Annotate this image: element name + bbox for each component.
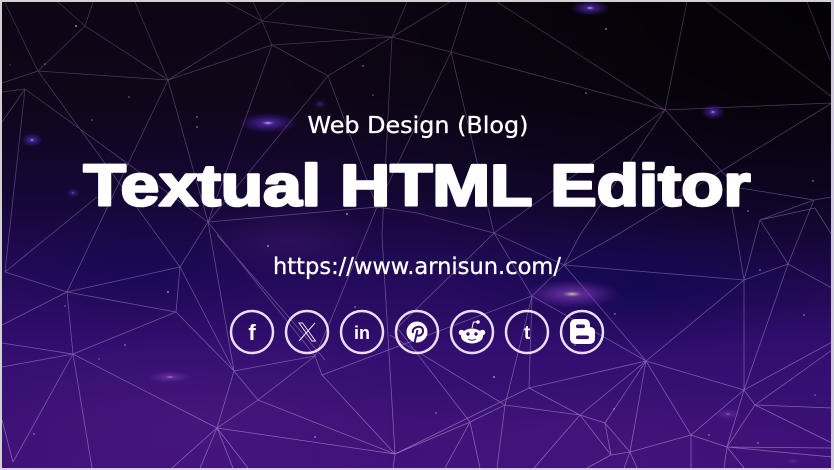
- subtitle: Web Design (Blog): [308, 113, 528, 139]
- website url: https://www.arnisun.com/: [273, 254, 561, 280]
- icon: facebook: [231, 311, 273, 353]
- title: Textual HTML Editor: [84, 154, 750, 218]
- icon: linkedin: [341, 311, 383, 353]
- icon: tumblr: [506, 311, 548, 353]
- social icons row: [231, 311, 603, 353]
- icon: facebook: f: [248, 320, 256, 345]
- icon: X: [286, 311, 328, 353]
- icon: blogger: [561, 311, 603, 353]
- icon: pinterest: [396, 311, 438, 353]
- icon: reddit: [451, 311, 493, 353]
- icon: tumblr: t: [524, 323, 531, 344]
- icon: linkedin: in: [354, 323, 370, 343]
